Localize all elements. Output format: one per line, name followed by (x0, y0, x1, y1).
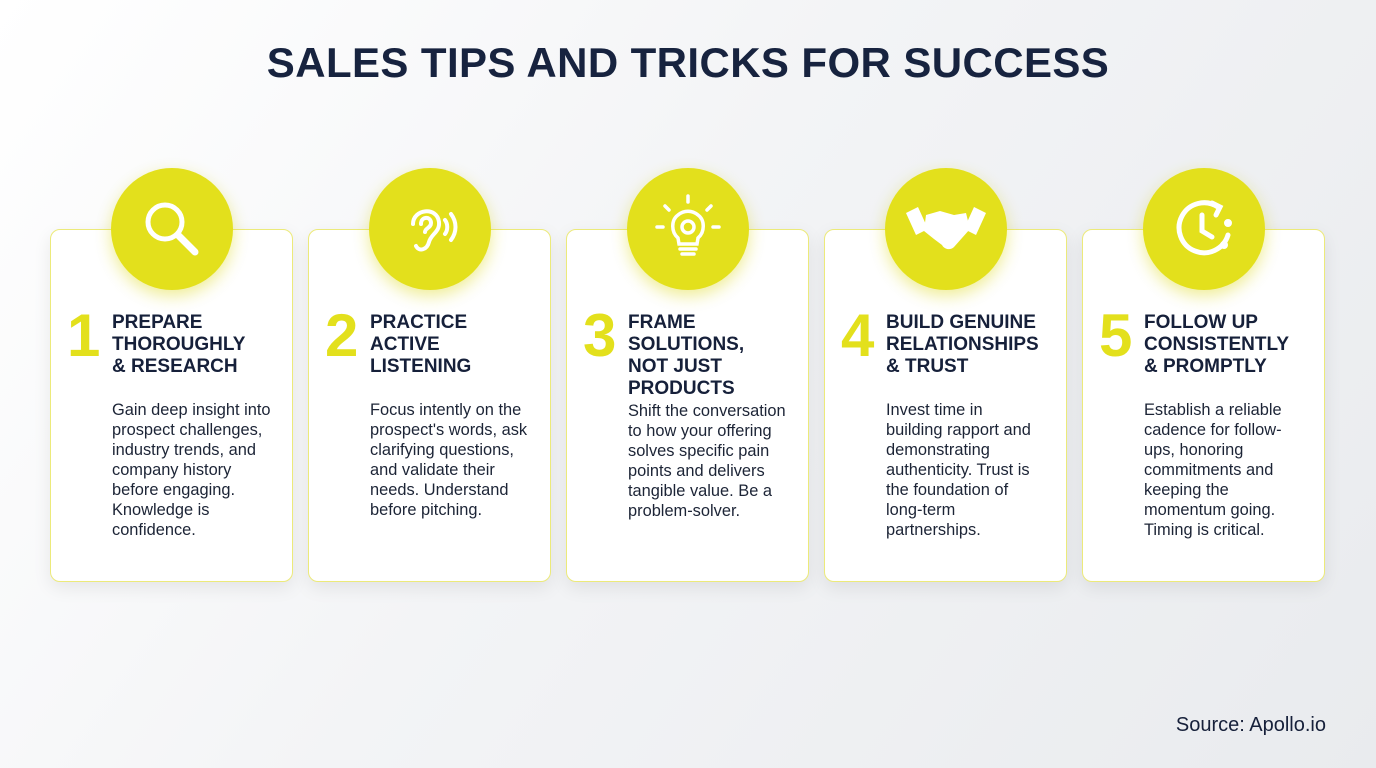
panel: card 2 (308, 229, 551, 582)
body 5: commitments and (1144, 461, 1273, 479)
title: SALES TIPS AND TRICKS FOR SUCCESS (267, 39, 1109, 86)
body 2: Focus intently on the (370, 401, 521, 419)
body 5: ups, honoring (1144, 441, 1243, 459)
body 2: needs. Understand (370, 481, 509, 499)
panel: card 4 (824, 229, 1067, 582)
number 1: 1 (67, 302, 100, 369)
body 5: momentum going. (1144, 501, 1275, 519)
heading 3 (628, 312, 744, 399)
body 5: cadence for follow- (1144, 421, 1282, 439)
body 4: partnerships. (886, 521, 981, 539)
body 1: company history (112, 461, 231, 479)
heading 5 (1144, 312, 1289, 377)
heading 2: LISTENING (370, 356, 471, 377)
number 2: 2 (325, 302, 358, 369)
panel: card 5 (1082, 229, 1325, 582)
heading 4: RELATIONSHIPS (886, 334, 1039, 355)
panel: card 1 (50, 229, 293, 582)
number 4: 4 (841, 302, 874, 369)
body 1: Gain deep insight into (112, 401, 271, 419)
heading 5: & PROMPTLY (1144, 356, 1267, 377)
heading 2 (370, 312, 471, 377)
heading 4: BUILD GENUINE (886, 312, 1036, 333)
body 2: before pitching. (370, 501, 482, 519)
body 3: to how your offering (628, 422, 772, 440)
body 5: Timing is critical. (1144, 521, 1265, 539)
body 2: and validate their (370, 461, 495, 479)
heading 2: ACTIVE (370, 334, 440, 355)
number 5: 5 (1099, 302, 1132, 369)
heading 1: PREPARE (112, 312, 202, 333)
heading 1 (112, 312, 246, 377)
icon: ear (369, 168, 491, 290)
body 4: the foundation of (886, 481, 1008, 499)
body 4: demonstrating (886, 441, 990, 459)
source: Source: Apollo.io (1176, 714, 1326, 736)
heading 1: THOROUGHLY (112, 334, 245, 355)
body 3: solves specific pain (628, 442, 769, 460)
body 4: long-term (886, 501, 955, 519)
body 4 (886, 401, 1031, 539)
body 3: tangible value. Be a (628, 482, 772, 500)
icon: clock (1143, 168, 1265, 290)
heading 3: FRAME (628, 312, 696, 333)
body 3 (628, 402, 786, 520)
icon: magnifier (111, 168, 233, 290)
body 4: building rapport and (886, 421, 1031, 439)
body 2 (370, 401, 527, 519)
body 5: keeping the (1144, 481, 1229, 499)
body 1: confidence. (112, 521, 196, 539)
body 5 (1144, 401, 1282, 539)
body 1: industry trends, and (112, 441, 256, 459)
heading 5: FOLLOW UP (1144, 312, 1258, 333)
heading 4 (886, 312, 1039, 377)
body 1: Knowledge is (112, 501, 210, 519)
body 4: Invest time in (886, 401, 983, 419)
body 5: Establish a reliable (1144, 401, 1282, 419)
number 3: 3 (583, 302, 616, 369)
panel: card 3 (566, 229, 809, 582)
heading 3: NOT JUST (628, 356, 722, 377)
body 3: problem-solver. (628, 502, 740, 520)
icon: handshake (885, 168, 1007, 290)
body 4: authenticity. Trust is (886, 461, 1030, 479)
body 3: points and delivers (628, 462, 765, 480)
body 1 (112, 401, 271, 539)
body 3: Shift the conversation (628, 402, 786, 420)
heading 3: PRODUCTS (628, 378, 735, 399)
heading 4: & TRUST (886, 356, 968, 377)
body 1: before engaging. (112, 481, 235, 499)
body 2: prospect's words, ask (370, 421, 527, 439)
heading 3: SOLUTIONS, (628, 334, 744, 355)
heading 5: CONSISTENTLY (1144, 334, 1289, 355)
body 2: clarifying questions, (370, 441, 514, 459)
body 1: prospect challenges, (112, 421, 262, 439)
icon: lightbulb (627, 168, 749, 290)
heading 2: PRACTICE (370, 312, 467, 333)
heading 1: & RESEARCH (112, 356, 238, 377)
